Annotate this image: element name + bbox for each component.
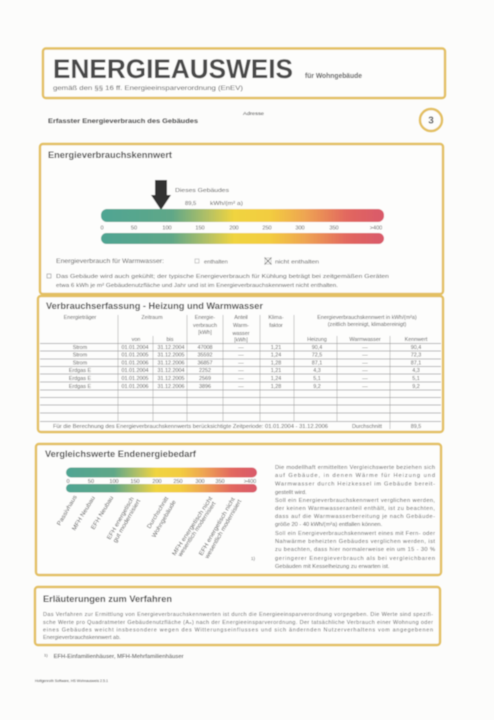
- table rows: —: [362, 376, 368, 382]
- table rows: 72,5: [312, 352, 322, 358]
- explanatory text: dass auf die Warmwasserbereitung je nach Gebäude-: [275, 514, 435, 520]
- heading: Verbrauchserfassung - Heizung und Warmwasser: [46, 301, 264, 311]
- table rows: —: [362, 368, 368, 374]
- table rows: —: [238, 376, 244, 382]
- panel: Verbrauchserfassung: [38, 296, 443, 432]
- table rows: 31.12.2004: [158, 368, 184, 374]
- scale bar: 50: [131, 226, 137, 232]
- cooling note: etwa 6 kWh je m² Gebäudenutzfläche und Jahr und ist im Energieverbrauchskennwert nicht enthalten.: [56, 283, 338, 289]
- rotated building type labels: EFH energetisch nicht: [199, 497, 237, 557]
- table rows: —: [362, 352, 368, 358]
- rotated building type labels: wesentlich modernisiert: [177, 501, 218, 559]
- table rows: Erdgas E: [69, 368, 91, 374]
- table rows: —: [238, 345, 244, 351]
- rotated building type labels: EFH energetisch: [107, 496, 136, 541]
- table rows: Erdgas E: [69, 376, 91, 382]
- table rows: 2569: [199, 376, 211, 382]
- table rows: 90,4: [411, 345, 421, 351]
- table footer: 89,5: [411, 424, 421, 430]
- table footer: Durchschnitt: [352, 424, 382, 430]
- hot water row: [56, 258, 319, 266]
- table header: (zeitlich bereinigt, klimabereinigt): [328, 322, 406, 328]
- hot water row: Energieverbrauch für Warmwasser:: [56, 258, 164, 265]
- table header: Energieverbrauchskennwert in kWh/(m²a): [317, 315, 417, 321]
- table rows: 4,3: [313, 368, 321, 374]
- table rows: Erdgas E: [69, 384, 91, 390]
- page subheading: Erfasster Energieverbrauch des Gebäudes: [48, 118, 198, 125]
- comparison scale bar: 350: [215, 479, 225, 485]
- table rows: 90,4: [312, 345, 322, 351]
- subtitle: building type: für Wohngebäude: [305, 71, 362, 80]
- table rows: Strom: [73, 345, 88, 351]
- comparison scale bar: 100: [109, 479, 119, 485]
- table rows: Strom: [73, 360, 88, 366]
- hot water row: nicht enthalten: [275, 260, 319, 266]
- explanatory text: größe 20 - 40 kWh/(m²a) entfallen können.: [275, 522, 383, 528]
- explanatory text: geringerer Energieverbrauch als bei vergleichbaren: [275, 556, 435, 562]
- footnote: 1): [44, 652, 48, 658]
- table rows: 01.01.2006: [122, 384, 148, 390]
- explanatory text: Soll ein Energieverbrauchskennwert verglichen werden,: [275, 498, 435, 504]
- table rows: —: [238, 368, 244, 374]
- cooling note: Das Gebäude wird auch gekühlt; der typische Energieverbrauch für Kühlung beträgt bei zeitgemäßen Geräten: [56, 274, 389, 280]
- table rows: 5,1: [412, 376, 420, 382]
- scale bar: 100: [162, 226, 172, 232]
- table footer: Für die Berechnung des Energieverbrauchskennwerts berücksichtigte Zeitperiode: 01.01.2004 - 31.12.2006: [53, 424, 328, 430]
- table rows: 01.01.2005: [122, 352, 148, 358]
- scale bar: 150: [195, 226, 205, 232]
- explanatory text: gestellt wird.: [275, 490, 307, 496]
- comparison scale bar: 50: [88, 479, 94, 485]
- footnote: EFH-Einfamilienhäuser, MFH-Mehrfamilienhäuser: [54, 654, 184, 660]
- rotated building type labels: wesentlich modernisiert: [204, 499, 243, 561]
- table rows: —: [362, 360, 368, 366]
- table header: [kWh]: [198, 330, 212, 336]
- comparison scale bar: >400: [244, 479, 256, 485]
- rotated building type labels: Passivhaus: [57, 495, 79, 527]
- table rows: —: [238, 352, 244, 358]
- rotated building type labels: EFH Neubau: [91, 495, 115, 531]
- page number badge: [420, 109, 442, 131]
- table rows: 1,28: [271, 360, 281, 366]
- this building label: [175, 188, 243, 207]
- page number badge: 3: [428, 116, 434, 126]
- panel: Erläuterungen: [35, 587, 440, 645]
- explanatory text: Nahwärme beheizten Gebäudes verglichen werden, ist: [275, 539, 435, 545]
- procedure text: [43, 612, 433, 641]
- table rows: 31.12.2006: [158, 384, 184, 390]
- table rows: 9,2: [412, 384, 420, 390]
- table rows: —: [238, 384, 244, 390]
- table header: faktor: [269, 323, 283, 329]
- table rows: 01.01.2006: [122, 360, 148, 366]
- address label: Adresse: [243, 111, 265, 116]
- table rows: 01.01.2004: [122, 345, 148, 351]
- this building label: kWh/(m² a): [210, 201, 243, 207]
- this building label: 89,5: [185, 201, 196, 207]
- table rows: 9,2: [313, 384, 321, 390]
- table rows: [69, 345, 421, 390]
- table header: Anteil: [234, 315, 248, 321]
- scale bar: 0: [100, 226, 104, 232]
- heading: Vergleichswerte Endenergiebedarf: [45, 449, 196, 459]
- rotated building type labels: gut modernisiert: [113, 498, 142, 544]
- table rows: 1,28: [271, 384, 281, 390]
- table header: wasser: [231, 331, 250, 337]
- panel: Vergleichswerte: [36, 444, 441, 575]
- rotated building type labels: MFH energetisch nicht: [172, 496, 214, 557]
- table header: verbrauch: [193, 323, 217, 329]
- table rows: 5,1: [313, 376, 321, 382]
- table rows: —: [362, 384, 368, 390]
- comparison scale bar: 0: [66, 479, 70, 485]
- explanatory text: Gebäuden mit Kesselheizung zu erwarten ist.: [275, 564, 390, 570]
- table header: Kennwert: [405, 337, 428, 343]
- procedure text: sche Werte pro Quadratmeter Gebäudenutzfläche (Aₙ) nach der Energieeinsparverordnung. Der tatsächliche Verbrauch einer Wohnung oder: [43, 620, 433, 626]
- procedure text: Das Verfahren zur Ermittlung von Energieverbrauchskennwerten ist durch die Energieeinsparverordnung vorgegeben. Die Werte sind spezifi-: [43, 612, 433, 618]
- table header: Warm-: [233, 323, 249, 329]
- table rows: 1,21: [271, 368, 281, 374]
- rotated building type labels: [57, 495, 243, 561]
- rotated building type labels: Durchschnitt: [147, 496, 170, 530]
- legal reference: gemäß den §§ 16 ff. Energieeinsparverordnung (EnEV): [53, 85, 243, 92]
- table header: Heizung: [307, 337, 327, 343]
- explanatory text: Warmwasser durch Heizkessel im Gebäude bereit-: [275, 482, 435, 488]
- explanatory text: auf Gebäude, in denen Wärme für Heizung und: [275, 473, 435, 479]
- panel: header: [43, 48, 445, 98]
- scale bar: [100, 209, 384, 244]
- comparison scale bar: 150: [130, 479, 140, 485]
- comparison scale bar: [66, 468, 257, 492]
- heading: Energieverbrauchskennwert: [48, 150, 172, 160]
- table rows: 1,21: [271, 345, 281, 351]
- rotated building type labels: MFH Neubau: [72, 496, 97, 532]
- panel: Energieverbrauchskennwert: [40, 144, 443, 294]
- table rows: 47008: [198, 345, 212, 351]
- scale bar: 250: [262, 226, 272, 232]
- table rows: —: [362, 345, 368, 351]
- comparison scale bar: 250: [173, 479, 183, 485]
- table rows: 87,1: [411, 360, 421, 366]
- table rows: 35592: [198, 352, 212, 358]
- table rows: 01.01.2004: [122, 368, 148, 374]
- explanatory text: Soll ein Energieverbrauchskennwert eines mit Fern- oder: [275, 531, 435, 537]
- procedure text: eines Gebäudes weicht insbesondere wegen des Witterungseinflusses und sich ändernden Nutzerverhaltens vom angegebenen: [43, 628, 433, 634]
- heading: Erläuterungen zum Verfahren: [43, 594, 172, 604]
- title: ENERGIEAUSWEIS: [53, 54, 293, 84]
- table header: Energieträger: [64, 315, 97, 321]
- software credit: Hottgenroth Software, HS Wohnausweis 2.5.1: [35, 679, 108, 683]
- explanatory text: [275, 465, 435, 570]
- table header: Warmwasser: [349, 337, 381, 343]
- table rows: 31.12.2006: [158, 360, 184, 366]
- consumption table: [40, 315, 441, 430]
- table rows: —: [238, 360, 244, 366]
- table rows: 3896: [199, 384, 211, 390]
- this building label: Dieses Gebäudes: [175, 188, 229, 194]
- table rows: 87,1: [312, 360, 322, 366]
- icon: arrow marker: [151, 180, 171, 210]
- scale bar: 300: [295, 226, 305, 232]
- table header: Zeitraum: [141, 315, 163, 321]
- table rows: 1,24: [271, 376, 281, 382]
- table header: Energie-: [195, 315, 215, 321]
- explanatory text: zu beachten, dass hier normalerweise ein um 15 - 30 %: [275, 547, 435, 553]
- table rows: 72,3: [411, 352, 421, 358]
- scale bar: 350: [329, 226, 339, 232]
- table rows: 31.12.2004: [158, 345, 184, 351]
- table rows: 1,24: [271, 352, 281, 358]
- table rows: 31.12.2005: [158, 376, 184, 382]
- explanatory text: der keinen Warmwasseranteil enthält, ist zu beachten,: [275, 506, 435, 512]
- table header: Klima-: [268, 315, 284, 321]
- rotated building type labels: Wohngebäude: [152, 499, 178, 539]
- scale bar: 200: [229, 226, 239, 232]
- explanatory text: Die modellhaft ermittelten Vergleichswerte beziehen sich: [275, 465, 435, 471]
- cooling note: [47, 274, 389, 289]
- procedure text: Energieverbrauchskennwert ab.: [43, 635, 121, 641]
- table header: von: [132, 337, 140, 343]
- table rows: Strom: [73, 352, 88, 358]
- comparison scale bar: 200: [152, 479, 162, 485]
- table header: bis: [167, 337, 174, 343]
- table rows: 01.01.2005: [122, 376, 148, 382]
- scale bar: >400: [370, 226, 382, 232]
- footnote marker: 1): [251, 556, 256, 561]
- table header: [kWh]: [234, 338, 248, 344]
- table rows: 2252: [199, 368, 211, 374]
- table rows: 36857: [198, 360, 212, 366]
- table rows: 31.12.2005: [158, 352, 184, 358]
- table header: [64, 315, 428, 344]
- table rows: 4,3: [412, 368, 420, 374]
- comparison scale bar: 300: [195, 479, 205, 485]
- hot water row: enthalten: [204, 260, 228, 266]
